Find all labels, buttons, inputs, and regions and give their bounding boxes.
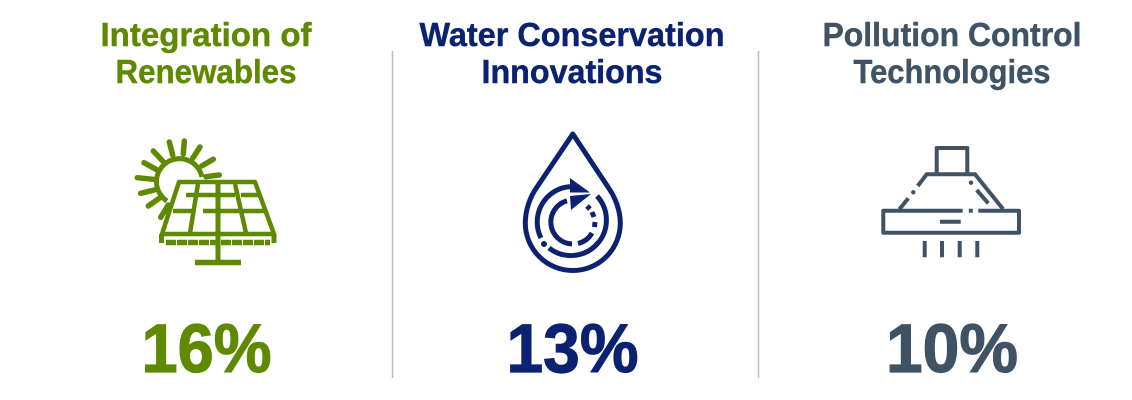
heading: water conservation innovations: Water Conservation: [420, 16, 724, 53]
value: 16%: 16%: [142, 310, 272, 387]
value: 13%: 13%: [506, 310, 638, 387]
heading: integration of renewables: [100, 16, 313, 90]
heading: pollution control technologies: Technologies: [854, 53, 1050, 90]
panel: pollution control technologies: [822, 16, 1082, 387]
panel: integration of renewables: [100, 16, 313, 387]
heading: pollution control technologies: [822, 16, 1082, 90]
icon: sun and solar panel: [137, 141, 274, 262]
heading: water conservation innovations: [420, 16, 724, 90]
icon: extractor hood: [883, 148, 1019, 257]
heading: integration of renewables: Renewables: [116, 53, 296, 90]
heading: water conservation innovations: Innovations: [482, 53, 662, 90]
value: 10%: 10%: [886, 310, 1018, 387]
heading: integration of renewables: Integration of: [100, 16, 313, 53]
heading: pollution control technologies: Pollution Control: [822, 16, 1082, 53]
panel: water conservation innovations: [420, 16, 724, 387]
icon: water drop with recycling arrows: [525, 134, 620, 270]
